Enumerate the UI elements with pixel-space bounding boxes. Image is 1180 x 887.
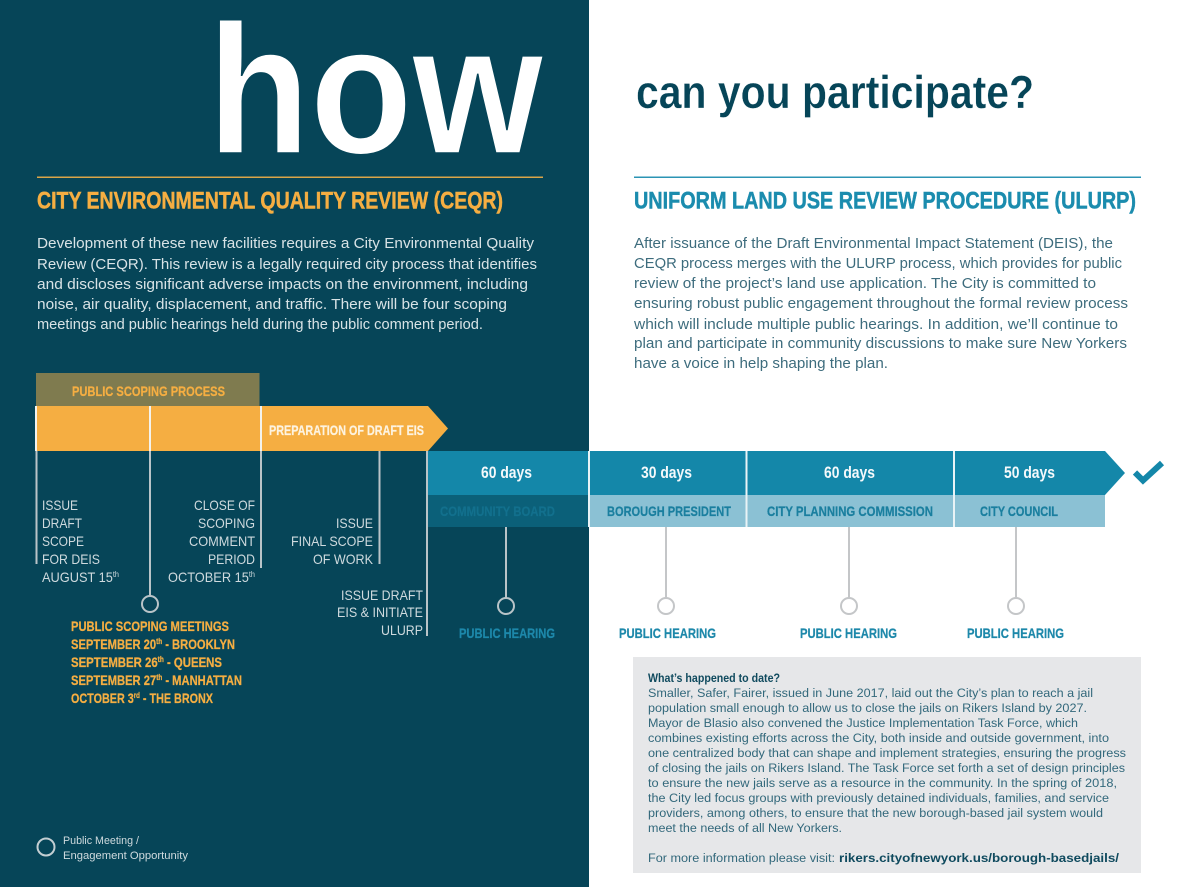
band: responsible bodies [428, 495, 1105, 527]
label: issue final scope of work [291, 515, 374, 567]
hearing: city council: PUBLIC HEARING [967, 625, 1064, 641]
hearing: city planning commission: PUBLIC HEARING [800, 625, 897, 641]
label: durations: 60 days [824, 463, 875, 482]
label: durations [481, 463, 1055, 482]
hearing: city planning commission [800, 527, 897, 641]
arrow: preparation of draft EIS [36, 406, 448, 451]
label: close of scoping comment period: SCOPING [198, 515, 255, 531]
label: durations: 30 days [641, 463, 692, 482]
text block: ULURP description: which will include multiple public hearings. In addition, we’ll continue to [633, 317, 1118, 333]
list: public scoping meetings: th [156, 673, 162, 682]
text block: CEQR description: noise, air quality, displacement, and traffic. There will be four scoping [37, 297, 507, 313]
text block: history: of closing the jails on Rikers Island. The Task Force set forth a set of design principles [648, 761, 1125, 775]
banner: public scoping process: PUBLIC SCOPING PROCESS [72, 383, 225, 399]
panel: dark left background [0, 0, 589, 887]
label: durations: 60 days [481, 463, 532, 482]
text block: ULURP description: CEQR process merges with the ULURP process, which provides for public [634, 256, 1122, 272]
list: public scoping meetings [71, 618, 242, 706]
text block: history: Smaller, Safer, Fairer, issued in June 2017, laid out the City’s plan to reach a jail [648, 686, 1093, 700]
text block: CEQR description: Review (CEQR). This review is a legally required city process that identifies [37, 257, 537, 273]
label: issue draft scope: FOR DEIS [42, 551, 100, 567]
label: review bodies [440, 503, 1058, 519]
label: issue final scope of work: OF WORK [313, 551, 374, 567]
text block: ULURP description [633, 236, 1128, 372]
label: review bodies: CITY PLANNING COMMISSION [767, 503, 933, 519]
hearing: community board [459, 527, 555, 641]
text block: ULURP description: review of the project’s land use application. The City is committed to [634, 276, 1096, 292]
label: issue draft scope [42, 497, 119, 585]
list: public scoping meetings: - MANHATTAN [162, 672, 242, 688]
label: issue draft scope: DRAFT [42, 515, 82, 531]
text block: history: Mayor de Blasio also convened the Justice Implementation Task Force, which [648, 716, 1078, 730]
label: issue draft scope: ISSUE [42, 497, 78, 513]
text block: CEQR description [37, 236, 537, 333]
list: public scoping meetings: - THE BRONX [140, 690, 214, 706]
text block: history: the City led focus groups with previously detained individuals, families, and service [648, 791, 1109, 805]
label: review bodies: COMMUNITY BOARD [440, 503, 555, 519]
text block: history: population small enough to allow us to close the jails on Rikers Island by 2027. [648, 701, 1087, 715]
chart: ULURP timeline [428, 451, 1162, 641]
text block: CEQR description: Development of these new facilities requires a City Environmental Quality [37, 236, 535, 252]
arrow: review period band [428, 451, 1125, 495]
legend: public meeting: Public Meeting / [63, 835, 140, 847]
label: issue draft EIS and initiate ULURP: EIS & INITIATE [337, 604, 423, 620]
label: issue draft EIS and initiate ULURP: ULURP [381, 622, 423, 638]
hearing: borough president: PUBLIC HEARING [619, 625, 716, 641]
list: public scoping meetings: SEPTEMBER 27 [71, 672, 178, 688]
text block: history [648, 686, 1126, 835]
text block: history: to ensure the new jails serve as a resource in the community. In the spring of 2018, [648, 776, 1117, 790]
label: issue final scope of work: ISSUE [336, 515, 373, 531]
list: public scoping meetings: SEPTEMBER 26 [71, 654, 178, 670]
list: public scoping meetings: PUBLIC SCOPING MEETINGS [71, 618, 229, 634]
label: issue draft scope: th [113, 570, 119, 579]
list: public scoping meetings: - BROOKLYN [162, 636, 235, 652]
label: close of scoping comment period: OCTOBER 15 [168, 569, 256, 585]
text block: history: providers, among others, to ensure that the new borough-based jail system would [648, 806, 1103, 820]
text block: CEQR description: and discloses significant adverse impacts on the environment, including [37, 277, 528, 293]
label: issue draft scope: SCOPE [42, 533, 84, 549]
list: public scoping meetings: th [156, 637, 162, 646]
list: public scoping meetings: OCTOBER 3 [71, 690, 152, 706]
label: issue draft EIS and initiate ULURP [337, 587, 423, 638]
text block: more information link: rikers.cityofnewyork.us/borough-basedjails/ [839, 851, 1120, 865]
icon: public meeting circle [142, 596, 158, 612]
label: issue final scope of work: FINAL SCOPE [291, 533, 373, 549]
label: close of scoping comment period: COMMENT [189, 533, 255, 549]
label: close of scoping comment period: th [249, 570, 255, 579]
text block: history: meet the needs of all New Yorkers. [648, 821, 842, 835]
label: close of scoping comment period: PERIOD [208, 551, 255, 567]
legend: public meeting [38, 835, 188, 862]
label: review bodies: BOROUGH PRESIDENT [607, 503, 731, 519]
heading: CEQR: CITY ENVIRONMENTAL QUALITY REVIEW (CEQR) [37, 188, 503, 214]
hearing: community board: PUBLIC HEARING [459, 625, 555, 641]
separators [588, 451, 955, 527]
list: public scoping meetings: rd [134, 691, 140, 700]
label: durations: 50 days [1004, 463, 1055, 482]
text block: ULURP description: have a voice in help shaping the plan. [634, 356, 888, 372]
list: public scoping meetings: SEPTEMBER 20 [71, 636, 178, 652]
list: public scoping meetings: th [158, 655, 164, 664]
label: issue draft EIS and initiate ULURP: ISSUE DRAFT [341, 587, 423, 603]
text block: history: combines existing efforts across the City, both inside and outside government, into [648, 731, 1109, 745]
text block: more information link: For more information please visit: [648, 851, 835, 865]
heading: what's happened to date: What’s happened to date? [648, 671, 780, 685]
connector lines [35, 406, 428, 636]
hearing: borough president [619, 527, 716, 641]
label: close of scoping comment period [168, 497, 255, 585]
title: can you participate: can you participate? [636, 66, 1034, 118]
icon: check mark [1135, 463, 1162, 480]
label: review bodies: CITY COUNCIL [980, 503, 1058, 519]
banner: public scoping process [36, 373, 260, 406]
arrow: preparation of draft EIS: PREPARATION OF DRAFT EIS [269, 422, 424, 438]
text block: ULURP description: ensuring robust public engagement throughout the formal review process [634, 296, 1128, 312]
legend: public meeting: Engagement Opportunity [63, 850, 188, 862]
list: public scoping meetings: - QUEENS [164, 654, 222, 670]
label: close of scoping comment period: CLOSE OF [194, 497, 255, 513]
chart: CEQR timeline [35, 373, 448, 706]
label: issue draft scope: AUGUST 15 [42, 569, 120, 585]
text block: history: one centralized body that can shape and implement strategies, ensuring the progress [648, 746, 1126, 760]
panel: ULURP section [633, 176, 1141, 372]
panel: what's happened to date [633, 657, 1141, 873]
text block: CEQR description: meetings and public hearings held during the public comment period. [37, 317, 483, 333]
hearing: city council [967, 527, 1064, 641]
text block: ULURP description: plan and participate in community discussions to make sure New Yorkers [634, 336, 1127, 352]
text block: more information link [648, 851, 1120, 865]
panel: CEQR section [37, 176, 543, 333]
text block: ULURP description: After issuance of the Draft Environmental Impact Statement (DEIS), the [634, 236, 1113, 252]
